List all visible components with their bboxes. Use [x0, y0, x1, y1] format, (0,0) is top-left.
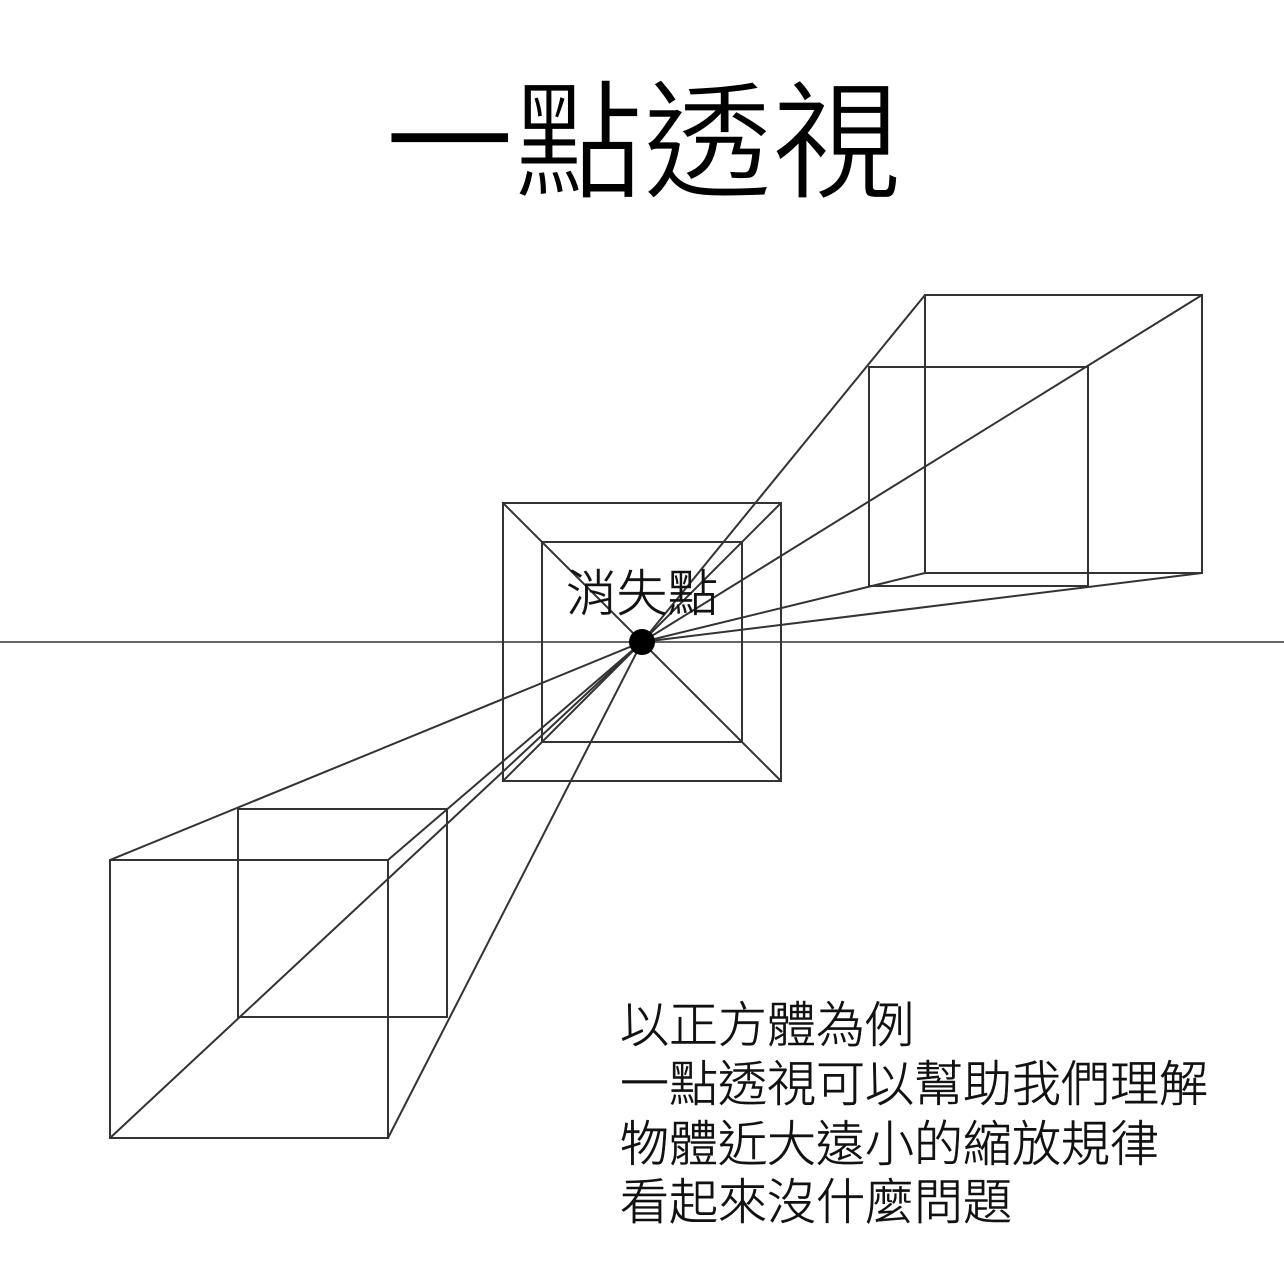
upper right cube: [642, 295, 1202, 642]
vanishing point label: 消失點: [566, 566, 718, 622]
title: 一點透視: [385, 72, 901, 216]
vanishing point dot: [629, 629, 655, 655]
lower left cube: [110, 642, 642, 1138]
explanatory text: 以正方體為例: [620, 999, 914, 1053]
explanatory text: [620, 999, 1208, 1230]
explanatory text: 物體近大遠小的縮放規律: [620, 1118, 1159, 1172]
explanatory text: 一點透視可以幫助我們理解: [620, 1058, 1208, 1112]
explanatory text: 看起來沒什麼問題: [620, 1176, 1012, 1230]
horizon line: [0, 641, 1284, 643]
center cube: [503, 503, 781, 781]
